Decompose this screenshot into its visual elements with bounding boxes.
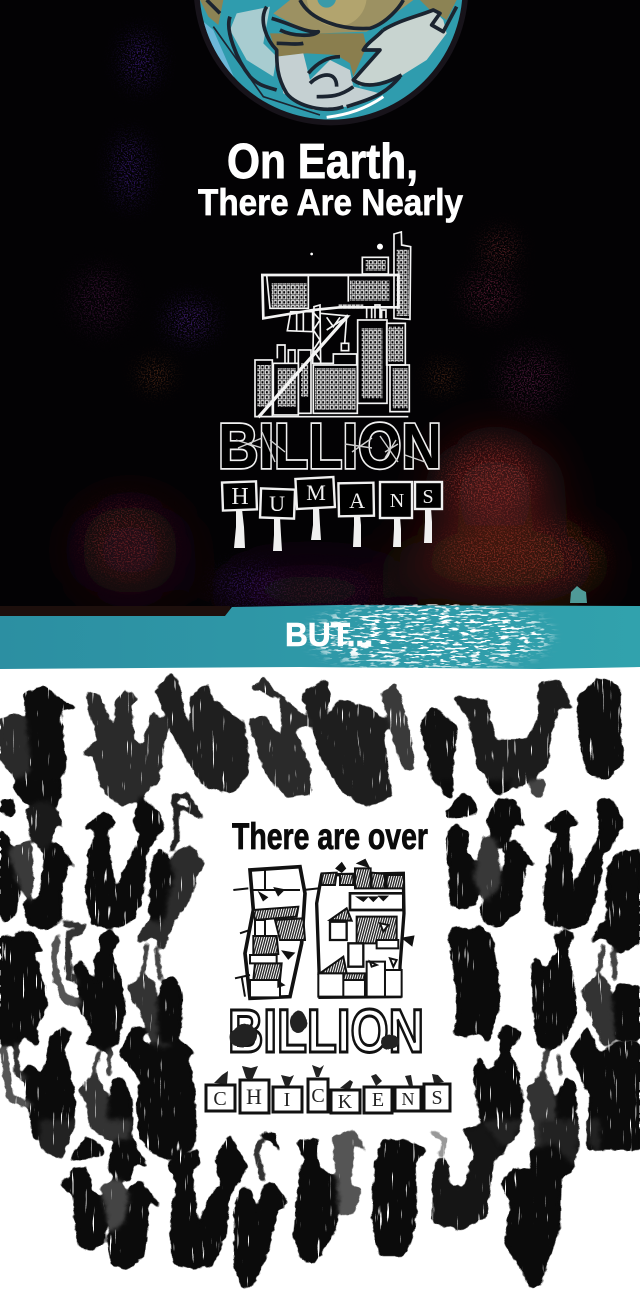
- figure holding A: A: [349, 488, 365, 513]
- icon: small teal city mark: [570, 586, 587, 603]
- chickens: bottom row: [40, 1120, 600, 1290]
- box H with bird: [240, 1066, 269, 1113]
- heading: There Are Nearly: There Are Nearly: [198, 182, 463, 223]
- right coop tower: [317, 860, 413, 997]
- illustration: chicken coop towers: [233, 860, 413, 998]
- chickens: left column: [0, 780, 205, 1140]
- box H with bird: H: [246, 1084, 262, 1109]
- chickens: top row: [0, 673, 624, 806]
- panel: white chicken section: [0, 655, 640, 1296]
- left coop tower: [233, 867, 318, 998]
- figure holding N: N: [390, 490, 404, 512]
- sign row: CHICKENS: [206, 1065, 450, 1113]
- box I with bird: I: [284, 1089, 290, 1111]
- chickens: right column: [442, 780, 640, 1150]
- heading: On Earth,: On Earth,: [227, 135, 418, 189]
- box N with bird: [395, 1075, 421, 1111]
- title: BILLION chickens: BILLION: [228, 997, 424, 1065]
- box C2 with bird: [308, 1065, 328, 1112]
- figure holding U: U: [269, 491, 285, 516]
- sign row: HUMANS: [222, 477, 442, 551]
- figure holding H: [222, 481, 257, 548]
- heading: There are over: There are over: [232, 816, 428, 857]
- icon: earth globe: [193, 0, 468, 125]
- figure holding H: H: [231, 484, 249, 510]
- box I with bird: [273, 1075, 302, 1112]
- figure holding S: [415, 482, 442, 543]
- heading: BUT...: BUT...: [285, 616, 373, 653]
- figure holding M: [295, 477, 335, 540]
- figure holding N: [380, 482, 412, 547]
- box K with bird: [331, 1080, 360, 1113]
- box C with bird: C: [213, 1088, 227, 1110]
- flock of ink chickens: [0, 673, 640, 1290]
- box C2 with bird: C: [311, 1085, 325, 1107]
- box S with bird: S: [431, 1087, 443, 1109]
- illustration: human city: [255, 232, 411, 417]
- title: BILLION humans: BILLION: [218, 410, 442, 482]
- figure holding A: [338, 483, 374, 547]
- box E with bird: [364, 1074, 392, 1113]
- figure holding M: M: [306, 480, 326, 505]
- figure holding S: S: [422, 486, 434, 508]
- box E with bird: E: [372, 1089, 384, 1111]
- figure holding U: [260, 488, 295, 551]
- box K with bird: K: [338, 1091, 353, 1113]
- box N with bird: N: [402, 1089, 414, 1109]
- banner: teal brush stroke: [0, 602, 640, 670]
- box C with bird: [206, 1071, 235, 1111]
- panel: night sky background: [0, 0, 640, 620]
- box S with bird: [424, 1074, 450, 1111]
